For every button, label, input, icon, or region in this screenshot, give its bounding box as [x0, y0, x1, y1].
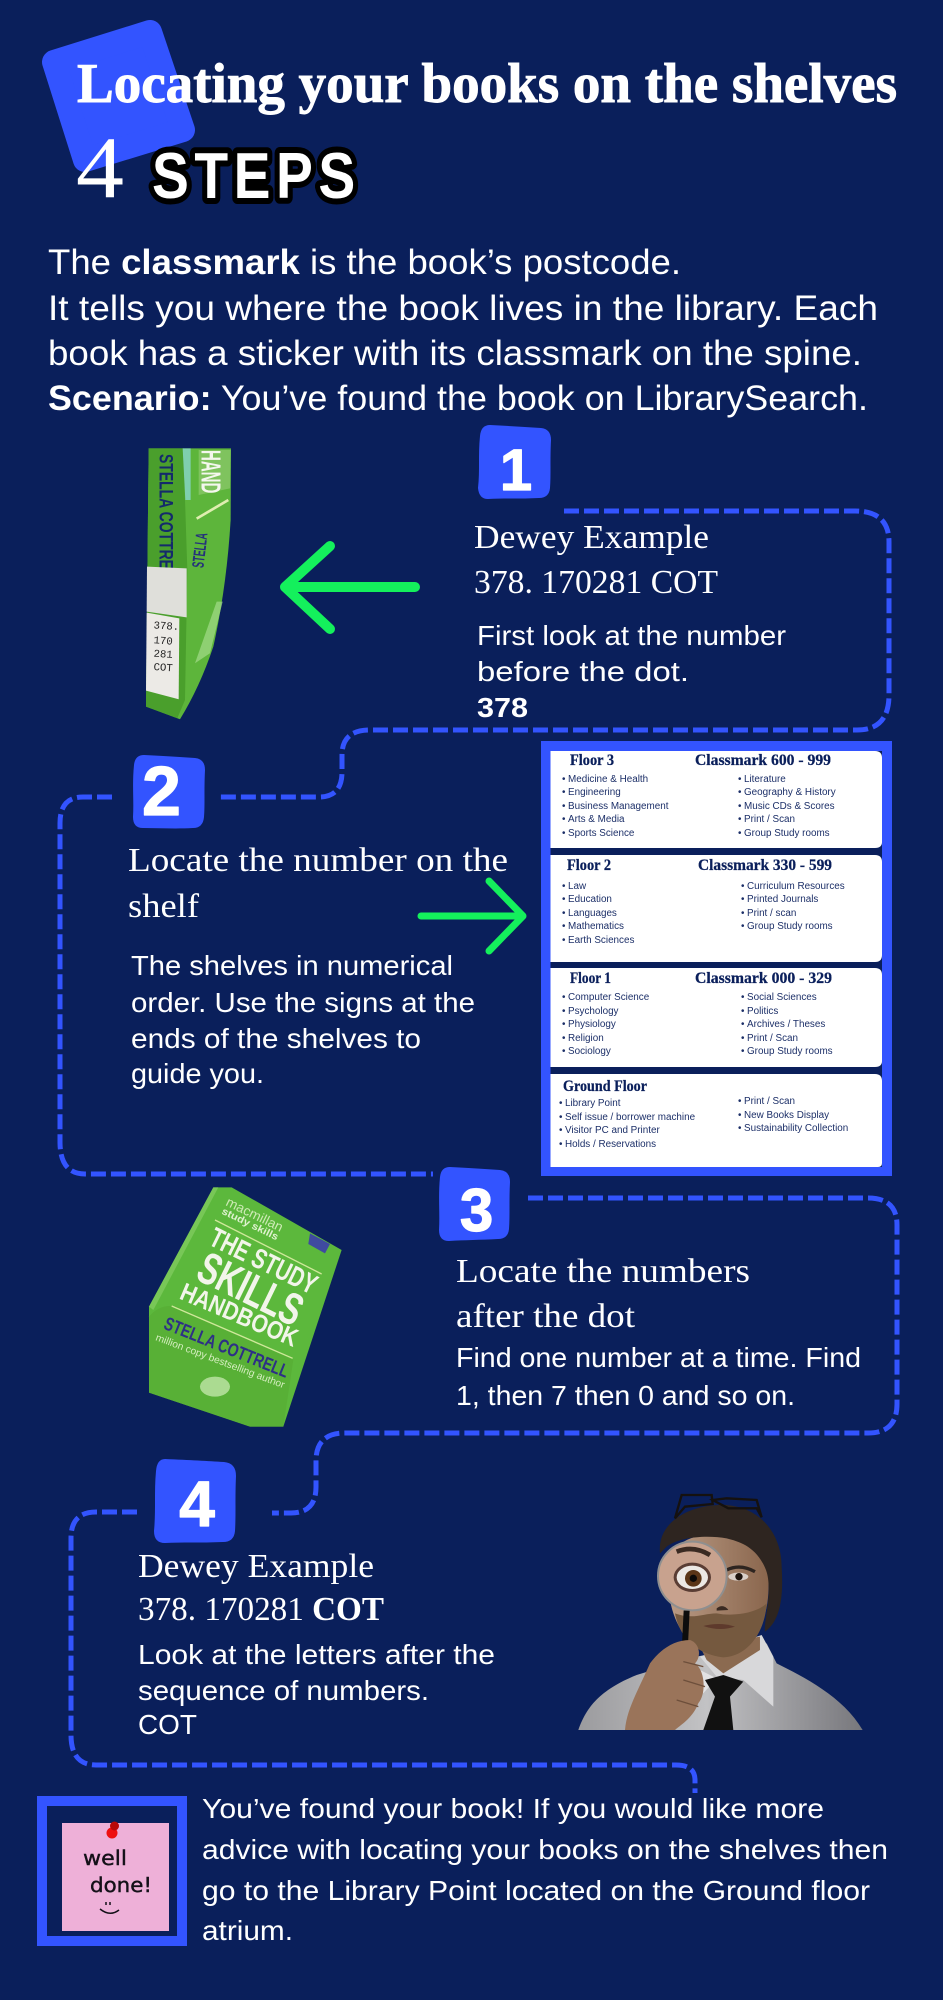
floor 2 card: •: [562, 908, 565, 919]
floor 1 card: •: [741, 1006, 744, 1017]
floor 2 card: •: [741, 921, 744, 932]
floor 2 card: •: [562, 935, 565, 946]
step 1 badge: [478, 425, 551, 503]
floor 1 card: Classmark 000 - 329: [695, 970, 832, 987]
floor 1 card: •: [562, 992, 565, 1003]
floor 3 card: •: [562, 814, 565, 825]
floor 2 card: •: [562, 921, 565, 932]
book cover image: HANDBOOK: [176, 1278, 303, 1353]
step 1 text: before the dot.: [477, 656, 689, 687]
book spine image: STELLA: [188, 532, 212, 569]
floor 3 card: Floor 3: [570, 752, 614, 769]
book cover image: SKILLS: [190, 1241, 312, 1336]
step 2 text: [128, 842, 508, 1089]
floor 3 card: Business Management: [568, 801, 669, 812]
book spine image: 170: [153, 635, 173, 649]
ground floor card: Visitor PC and Printer: [565, 1125, 660, 1136]
floor 1 card: Archives / Theses: [747, 1019, 825, 1030]
floor 3 card: Literature: [744, 774, 786, 785]
ground floor card: New Books Display: [744, 1110, 829, 1121]
floor 1 card: Politics: [747, 1006, 778, 1017]
step 4 text: Look at the letters after the: [138, 1639, 495, 1670]
floor 1 card: •: [562, 1019, 565, 1030]
floor 3 card: Engineering: [568, 787, 621, 798]
step 1 text: Dewey Example: [474, 519, 709, 556]
book spine image: 378.: [153, 620, 179, 634]
man with magnifying glass image: [578, 1495, 863, 1730]
well done sticky note: well: [83, 1846, 127, 1870]
step 1 text: [474, 519, 786, 723]
floor 3 card: Music CDs & Scores: [744, 801, 835, 812]
floor 1 card: •: [741, 992, 744, 1003]
panel: floor guide: [541, 741, 892, 1176]
well done sticky note: [62, 1822, 169, 1931]
step 4 badge: [154, 1459, 236, 1543]
book cover image: THE STUDY: [205, 1222, 323, 1300]
arrow: right to floor guide: [421, 881, 523, 951]
book cover image: [149, 1187, 342, 1427]
step 2 text: ends of the shelves to: [131, 1023, 421, 1054]
floor 2 card: •: [741, 894, 744, 905]
floor 3 card: •: [562, 787, 565, 798]
floor 1 card: •: [562, 1006, 565, 1017]
well done sticky note: done!: [90, 1873, 152, 1897]
ground floor card: Ground Floor: [563, 1078, 647, 1095]
floor 1 card: •: [741, 1019, 744, 1030]
floor 2 card: Mathematics: [568, 921, 624, 932]
book cover image: STELLA COTTRELL: [161, 1313, 292, 1382]
intro text: Scenario: You’ve found the book on LibrarySearch.: [48, 378, 868, 418]
floor 1 card: Social Sciences: [747, 992, 817, 1003]
step 1 text: First look at the number: [477, 620, 786, 651]
closing text: advice with locating your books on the shelves then: [202, 1834, 888, 1865]
floor 3 card: Sports Science: [568, 828, 635, 839]
ground floor card: •: [559, 1125, 562, 1136]
dashed path: step 3 to step 4: [272, 1198, 897, 1513]
floor 2 card: •: [562, 881, 565, 892]
book spine image: STELLA COTTRE: [154, 454, 175, 569]
step 4 badge: 4: [179, 1468, 215, 1540]
floor 2 card: Floor 2: [567, 857, 611, 874]
floor 3 card: •: [562, 774, 565, 785]
intro text: It tells you where the book lives in the library. Each: [48, 288, 878, 328]
floor 1 card: Sociology: [568, 1046, 611, 1057]
floor 2 card: Printed Journals: [747, 894, 818, 905]
floor 2 card: •: [741, 908, 744, 919]
floor 2 card: •: [741, 881, 744, 892]
arrow: left to book spine: [285, 546, 415, 629]
step 1 badge: 1: [500, 438, 532, 503]
ground floor card: Library Point: [565, 1098, 621, 1109]
step 2 text: shelf: [128, 888, 200, 925]
step 3 badge: [439, 1167, 510, 1244]
closing text: go to the Library Point located on the Ground floor: [202, 1875, 870, 1906]
ground floor card: Sustainability Collection: [744, 1123, 848, 1134]
ground floor card: •: [559, 1098, 562, 1109]
book spine image: [146, 448, 231, 719]
dashed path: step 1 to step 2: [218, 511, 889, 797]
step 2 text: The shelves in numerical: [131, 950, 453, 981]
floor 2 card: [550, 855, 882, 962]
ground floor card: •: [738, 1096, 741, 1107]
floor 3 card: Print / Scan: [744, 814, 795, 825]
book cover image: million copy bestselling author: [154, 1332, 287, 1391]
floor 2 card: •: [562, 894, 565, 905]
floor 3 card: Classmark 600 - 999: [695, 752, 831, 769]
floor 3 card: •: [738, 828, 741, 839]
floor 3 card: Medicine & Health: [568, 774, 648, 785]
step 2 text: guide you.: [131, 1058, 264, 1089]
step 4 text: sequence of numbers.: [138, 1675, 429, 1706]
closing text: atrium.: [202, 1915, 293, 1946]
floor 2 card: Print / scan: [747, 908, 796, 919]
step 3 text: 1, then 7 then 0 and so on.: [456, 1380, 795, 1411]
step 3 text: after the dot: [456, 1298, 636, 1335]
floor 3 card: •: [738, 774, 741, 785]
floor 2 card: Group Study rooms: [747, 921, 833, 932]
floor 1 card: Psychology: [568, 1006, 619, 1017]
ground floor card: •: [738, 1123, 741, 1134]
book spine image: HAND: [196, 450, 227, 493]
floor 1 card: Group Study rooms: [747, 1046, 833, 1057]
floor 3 card: Group Study rooms: [744, 828, 830, 839]
intro text: The classmark is the book’s postcode.: [48, 242, 681, 282]
step 3 text: [456, 1253, 861, 1411]
step 3 text: Locate the numbers: [456, 1253, 750, 1290]
book cover image: study skills: [220, 1206, 280, 1243]
floor 3 card: •: [562, 828, 565, 839]
step 4 text: COT: [138, 1709, 197, 1740]
floor 3 card: •: [738, 801, 741, 812]
floor 2 card: Law: [568, 881, 587, 892]
step 3 badge: 3: [460, 1177, 493, 1244]
floor 2 card: Languages: [568, 908, 617, 919]
step 3 text: Find one number at a time. Find: [456, 1342, 861, 1373]
ground floor card: Print / Scan: [744, 1096, 795, 1107]
heading: 4 steps: 4: [76, 120, 124, 217]
book cover image: macmillan: [224, 1194, 286, 1235]
dashed path: step 4 to closing note: [71, 1512, 695, 1793]
closing text: [202, 1793, 888, 1946]
heading: 4 steps: STEPS: [152, 139, 361, 212]
floor 2 card: Education: [568, 894, 612, 905]
closing text: You’ve found your book! If you would like more: [202, 1793, 824, 1824]
title: Locating your books on the shelves: [77, 53, 897, 115]
ground floor card: •: [559, 1139, 562, 1150]
ground floor card: Holds / Reservations: [565, 1139, 656, 1150]
floor 2 card: Classmark 330 - 599: [698, 857, 832, 874]
ground floor card: [550, 1074, 882, 1167]
book spine image: COT: [153, 662, 173, 675]
floor 1 card: •: [562, 1033, 565, 1044]
decorative blue blob behind title: [54, 32, 183, 160]
book spine image: 281: [153, 649, 173, 662]
closing note frame: [42, 1801, 182, 1941]
step 2 text: Locate the number on the: [128, 842, 508, 879]
ground floor card: •: [559, 1112, 562, 1123]
floor 1 card: •: [741, 1046, 744, 1057]
floor 3 card: •: [738, 787, 741, 798]
floor 1 card: [550, 968, 882, 1067]
step 4 text: [138, 1548, 495, 1740]
step 4 text: 378. 170281 COT: [138, 1591, 384, 1628]
floor 3 card: •: [562, 801, 565, 812]
floor 3 card: •: [738, 814, 741, 825]
intro text: [48, 242, 878, 418]
floor 1 card: Floor 1: [570, 970, 611, 987]
heading: 4 steps: [76, 120, 361, 217]
step 1 text: 378: [477, 692, 528, 723]
floor 1 card: Computer Science: [568, 992, 650, 1003]
floor 1 card: Print / Scan: [747, 1033, 798, 1044]
step 2 text: order. Use the signs at the: [131, 987, 475, 1018]
dashed path: step 2 to step 3: [60, 797, 433, 1174]
floor 2 card: Curriculum Resources: [747, 881, 845, 892]
ground floor card: Self issue / borrower machine: [565, 1112, 696, 1123]
floor 1 card: •: [562, 1046, 565, 1057]
step 2 badge: 2: [142, 752, 181, 830]
step 1 text: 378. 170281 COT: [474, 564, 718, 601]
floor 1 card: •: [741, 1033, 744, 1044]
floor 1 card: Physiology: [568, 1019, 616, 1030]
intro text: book has a sticker with its classmark on the spine.: [48, 333, 862, 373]
floor 3 card: [550, 751, 882, 848]
floor 3 card: Geography & History: [744, 787, 836, 798]
floor 1 card: Religion: [568, 1033, 604, 1044]
floor 3 card: Arts & Media: [568, 814, 625, 825]
ground floor card: •: [738, 1110, 741, 1121]
step 4 text: Dewey Example: [138, 1548, 374, 1585]
step 2 badge: [133, 752, 205, 830]
floor 2 card: Earth Sciences: [568, 935, 634, 946]
